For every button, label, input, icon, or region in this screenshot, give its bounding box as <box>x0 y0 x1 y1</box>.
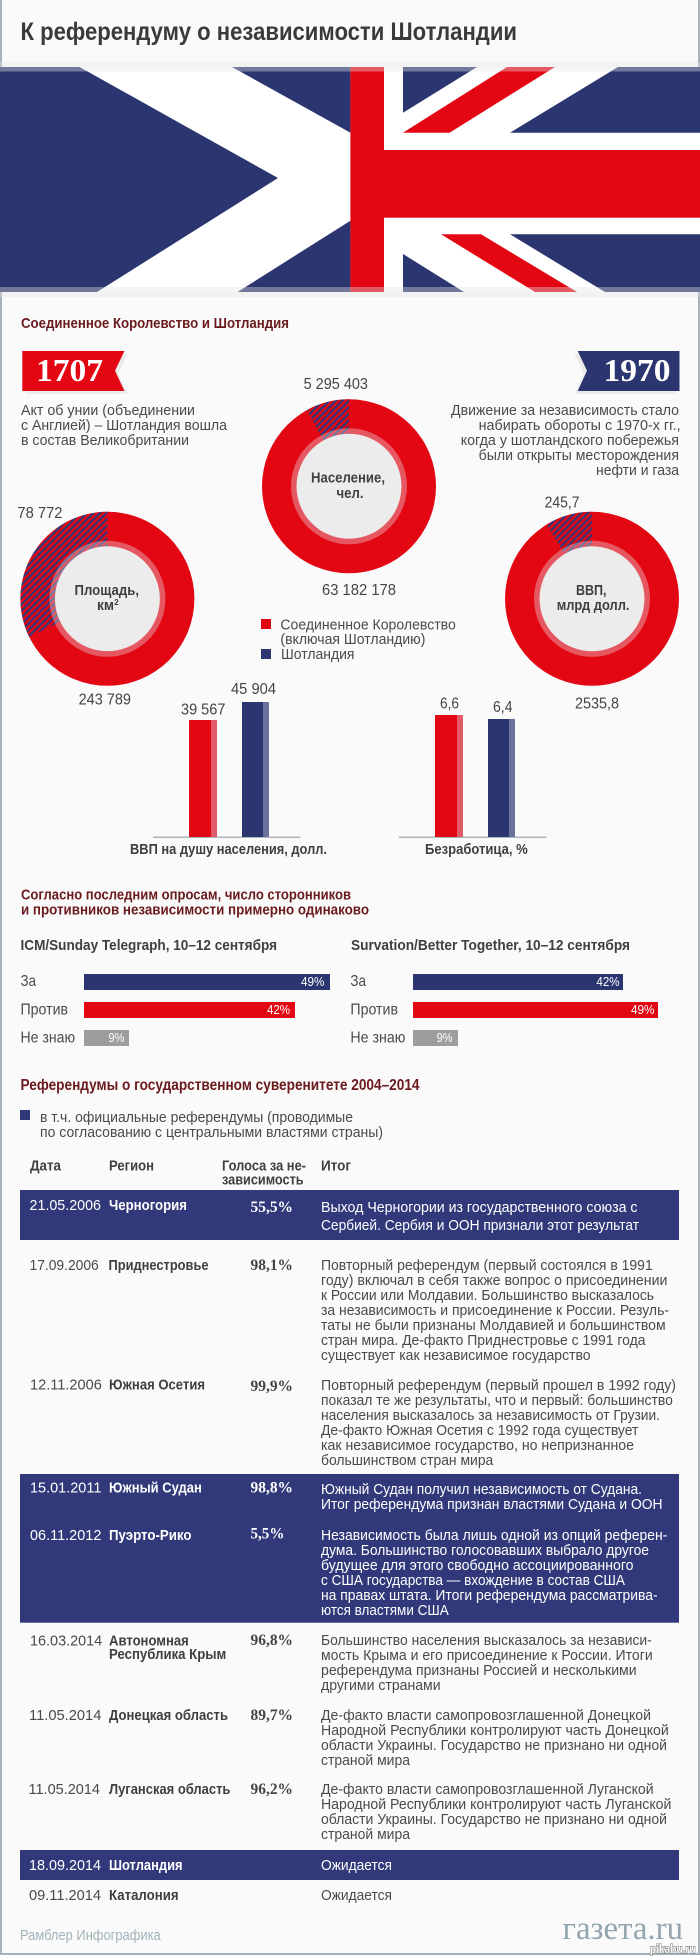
row: Catalonia <box>29 1887 392 1904</box>
row: Donetsk: 89,7% <box>250 1707 293 1724</box>
table legend: по согласованию с центральными властями страны) <box>40 1124 383 1141</box>
flag banner <box>0 62 700 297</box>
row block: South Sudan and Puerto Rico: Пуэрто-Рико <box>109 1527 192 1544</box>
row block: South Sudan and Puerto Rico: 5,5% <box>250 1526 284 1543</box>
table header: Дата <box>30 1157 62 1174</box>
poll: ICM/Sunday Telegraph: 9% <box>108 1030 125 1045</box>
row block: South Sudan and Puerto Rico: 06.11.2012 <box>30 1527 101 1544</box>
row: South Ossetia: большинством стран мира <box>321 1452 494 1469</box>
row: Luhansk: области Украины. Государство не признано ни одной <box>321 1811 667 1828</box>
title: К референдуму о независимости Шотландии <box>20 18 517 46</box>
text: independence movement: нефти и газа <box>596 462 680 479</box>
row: Scotland: 18.09.2014 <box>29 1857 101 1874</box>
bar chart: GDP per capita: 45 904 <box>231 681 276 698</box>
row: Catalonia: Ожидается <box>321 1887 392 1904</box>
row: Montenegro <box>20 1190 679 1240</box>
text: independence movement: когда у шотландского побережья <box>461 432 679 449</box>
row: Transnistria: стран мира. Де-факто Приднестровье с 1991 года <box>321 1332 646 1349</box>
row: South Ossetia: показал те же результаты, что и первый: большинство <box>321 1392 673 1409</box>
logo: gazeta.ru: газета.ru <box>562 1911 683 1947</box>
badge: 1970: 1970 <box>604 352 670 388</box>
legend: (включая Шотландию) <box>280 631 425 648</box>
row: South Ossetia: как независимое государство, но непризнанное <box>321 1437 634 1454</box>
donut: population: 63 182 178 <box>322 582 396 599</box>
row: Donetsk: 11.05.2014 <box>29 1707 101 1724</box>
row: Montenegro: 21.05.2006 <box>30 1197 101 1214</box>
text: Act of Union <box>21 402 228 449</box>
row: Transnistria: году) включал в себя также вопрос о присоединении <box>321 1272 667 1289</box>
row: Luhansk: Луганская область <box>109 1781 230 1798</box>
heading: polls <box>21 886 369 918</box>
row: Crimea: мость Крыма и его присоединение к России. Итоги <box>321 1647 653 1664</box>
row: Luhansk: Народной Республики контролируют часть Луганской <box>321 1796 671 1813</box>
table header: Регион <box>109 1157 154 1174</box>
row: Transnistria: к России или Молдавии. Большинство высказалось <box>321 1287 654 1304</box>
table header: Итог <box>321 1157 351 1174</box>
bar chart: unemployment <box>399 695 546 858</box>
row: Montenegro: Выход Черногории из государственного союза с <box>321 1199 638 1216</box>
bar chart: GDP per capita: ВВП на душу населения, долл. <box>130 841 327 858</box>
row: Donetsk: Донецкая область <box>109 1707 228 1724</box>
donut: area: км <box>97 597 114 614</box>
donut: GDP: млрд долл. <box>557 597 630 614</box>
row block: South Sudan and Puerto Rico: дума. Большинство голосовавших выбрало другое <box>321 1542 649 1559</box>
row: Scotland <box>20 1850 679 1880</box>
row: South Ossetia: населения высказалось за независимость от Грузии. <box>321 1407 660 1424</box>
poll: Survation/Better Together: Против <box>350 1001 398 1018</box>
row: Montenegro: Сербией. Сербия и ООН признали этот результат <box>321 1217 639 1234</box>
row: Donetsk: области Украины. Государство не признано ни одной <box>321 1737 667 1754</box>
row: Donetsk: Де-факто власти самопровозглашенной Донецкой <box>321 1707 651 1724</box>
poll: ICM/Sunday Telegraph: Не знаю <box>20 1029 75 1046</box>
row: Donetsk <box>29 1707 669 1769</box>
text: Act of Union: в состав Великобритании <box>21 432 189 449</box>
row: Crimea: Большинство населения высказалось за независи- <box>321 1632 652 1649</box>
text: independence movement: набирать обороты с 1970-х гг., <box>479 417 681 434</box>
poll: Survation/Better Together: 42% <box>596 974 620 989</box>
row block: South Sudan and Puerto Rico: 98,8% <box>250 1479 293 1496</box>
heading: polls: и противников независимости примерно одинаково <box>21 901 369 918</box>
row: South Ossetia: 12.11.2006 <box>30 1376 102 1393</box>
row: Crimea: Республика Крым <box>109 1646 226 1663</box>
table header: зависимость <box>222 1171 304 1188</box>
poll: Survation/Better Together <box>350 937 658 1046</box>
donut: area: Площадь, <box>74 582 139 599</box>
row: Crimea: Автономная <box>109 1632 189 1649</box>
row: Catalonia: 09.11.2014 <box>29 1887 101 1904</box>
donut: population <box>262 376 436 599</box>
row: Donetsk: страной мира <box>321 1752 411 1769</box>
row: Luhansk: Де-факто власти самопровозглашенной Луганской <box>321 1781 654 1798</box>
heading: UK and Scotland: Соединенное Королевство и Шотландия <box>21 315 289 332</box>
legend: Шотландия <box>281 646 354 663</box>
poll: Survation/Better Together: 9% <box>437 1030 453 1045</box>
row: South Ossetia <box>30 1376 676 1469</box>
bar chart: GDP per capita: 39 567 <box>181 701 225 718</box>
donut: area: 78 772 <box>17 505 63 522</box>
table legend: в т.ч. официальные референдумы (проводимые <box>40 1109 353 1126</box>
bar chart: unemployment: Безработица, % <box>425 841 528 858</box>
text: independence movement: были открыты месторождения <box>479 447 679 464</box>
poll: ICM/Sunday Telegraph: 49% <box>301 974 325 989</box>
heading: referendums: Референдумы о государственном суверенитете 2004–2014 <box>20 1077 420 1094</box>
row: Crimea: 16.03.2014 <box>30 1632 102 1649</box>
row: Transnistria: 98,1% <box>250 1257 293 1274</box>
row: Crimea <box>30 1632 653 1694</box>
row: South Ossetia: Повторный референдум (первый прошел в 1992 году) <box>321 1377 676 1394</box>
row: Donetsk: Народной Республики контролируют часть Донецкой <box>321 1722 669 1739</box>
donut: GDP: 245,7 <box>545 494 580 511</box>
row: Luhansk <box>28 1781 671 1843</box>
bar chart: unemployment: 6,4 <box>493 699 513 716</box>
poll: ICM/Sunday Telegraph: 42% <box>267 1002 290 1017</box>
badge: 1707: 1707 <box>36 352 103 388</box>
donut: area: 243 789 <box>79 691 131 708</box>
row: South Ossetia: Де-факто Южная Осетия с 1992 года существует <box>321 1422 639 1439</box>
row block: South Sudan and Puerto Rico <box>20 1474 679 1623</box>
text: Act of Union: Акт об унии (объединении <box>21 402 195 419</box>
table header <box>30 1157 351 1188</box>
table legend <box>20 1109 383 1141</box>
poll: Survation/Better Together: 49% <box>631 1002 655 1017</box>
row: Transnistria <box>30 1257 669 1364</box>
row: South Ossetia: Южная Осетия <box>109 1376 205 1393</box>
poll: ICM/Sunday Telegraph: ICM/Sunday Telegraph, 10–12 сентября <box>20 937 277 954</box>
row: Transnistria: Приднестровье <box>108 1257 208 1274</box>
row: Crimea: другими странами <box>321 1677 441 1694</box>
row: Montenegro: 55,5% <box>250 1199 293 1216</box>
row block: South Sudan and Puerto Rico: будущее для этого свободно ассоциированного <box>321 1557 634 1574</box>
legend: Соединенное Королевство <box>280 616 456 633</box>
poll: Survation/Better Together: За <box>350 973 366 990</box>
poll: ICM/Sunday Telegraph: За <box>20 973 36 990</box>
row block: South Sudan and Puerto Rico: Итог референдума признан властями Судана и ООН <box>321 1496 662 1513</box>
row: Crimea: 96,8% <box>250 1632 293 1649</box>
row: Scotland: Ожидается <box>321 1857 392 1874</box>
donut: GDP <box>505 494 679 712</box>
text: independence movement: Движение за независимость стало <box>451 402 679 419</box>
text: independence movement <box>451 402 681 479</box>
row block: South Sudan and Puerto Rico: ются властями США <box>321 1602 449 1619</box>
row: Montenegro: Черногория <box>109 1197 187 1214</box>
heading: polls: Согласно последним опросам, число сторонников <box>21 886 351 903</box>
poll: ICM/Sunday Telegraph <box>20 937 330 1046</box>
row block: South Sudan and Puerto Rico: на правах штата. Итоги референдума рассматрива- <box>321 1587 658 1604</box>
row block: South Sudan and Puerto Rico: 15.01.2011 <box>30 1479 101 1496</box>
table header: Голоса за не- <box>222 1157 306 1174</box>
donut: GDP: ВВП, <box>576 582 606 599</box>
legend <box>261 616 456 663</box>
row block: South Sudan and Puerto Rico: Южный Судан получил независимость от Судана. <box>321 1481 642 1498</box>
row: Luhansk: 96,2% <box>250 1781 293 1798</box>
row: Transnistria: существует как независимое государство <box>321 1347 591 1364</box>
bar chart: GDP per capita <box>130 681 327 858</box>
donut: population: чел. <box>336 485 364 502</box>
row: Transnistria: за независимость и присоединение к России. Резуль- <box>321 1302 669 1319</box>
donut: area <box>17 505 194 708</box>
row block: South Sudan and Puerto Rico: с США государства — вхождение в состав США <box>321 1572 625 1589</box>
row: Transnistria: Повторный референдум (первый состоялся в 1991 <box>321 1257 653 1274</box>
row: Scotland: Шотландия <box>109 1857 183 1874</box>
row: Transnistria: 17.09.2006 <box>30 1257 99 1274</box>
donut: area: 2 <box>114 598 119 607</box>
row block: South Sudan and Puerto Rico: Южный Судан <box>109 1479 202 1496</box>
poll: ICM/Sunday Telegraph: Против <box>20 1001 68 1018</box>
donut: population: 5 295 403 <box>304 376 368 393</box>
badge: 1970 <box>574 351 680 394</box>
row: Luhansk: страной мира <box>321 1826 411 1843</box>
badge: 1707 <box>22 351 127 394</box>
donut: population: Население, <box>311 470 385 487</box>
row: Catalonia: Каталония <box>109 1887 179 1904</box>
row: Transnistria: таты не были признаны Молдавией и большинством <box>321 1317 666 1334</box>
donut: GDP: 2535,8 <box>575 695 619 712</box>
bar chart: unemployment: 6,6 <box>440 695 459 712</box>
row: Luhansk: 11.05.2014 <box>28 1781 100 1798</box>
poll: Survation/Better Together: Не знаю <box>350 1029 405 1046</box>
row: Crimea: референдума признаны Россией и несколькими <box>321 1662 637 1679</box>
footer credit: Рамблер Инфографика <box>20 1927 161 1944</box>
poll: Survation/Better Together: Survation/Better Together, 10–12 сентября <box>351 937 630 954</box>
row: South Ossetia: 99,9% <box>250 1378 293 1395</box>
row block: South Sudan and Puerto Rico: Независимость была лишь одной из опций референ- <box>321 1527 667 1544</box>
text: Act of Union: с Англией) – Шотландия вошла <box>21 417 228 434</box>
